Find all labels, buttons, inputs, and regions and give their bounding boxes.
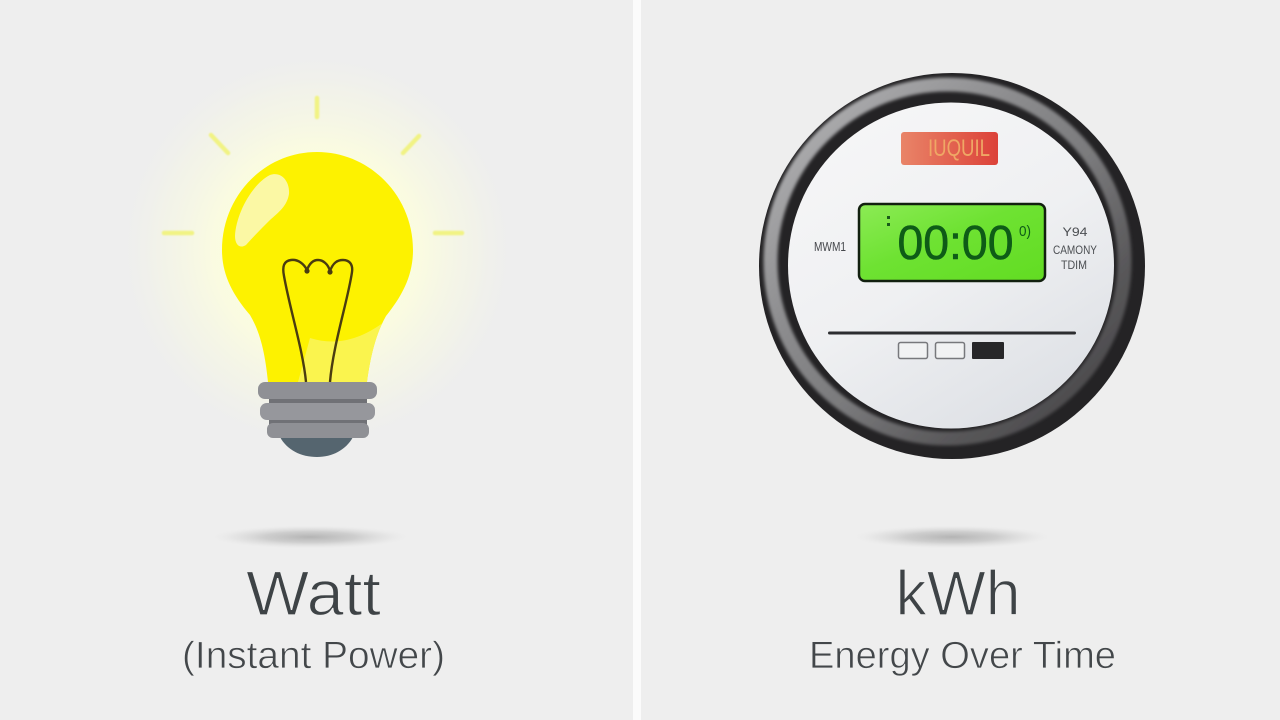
infographic: watt vs kWh comparison xyxy=(160,0,1145,720)
filament xyxy=(283,260,352,382)
icon: light glow xyxy=(112,45,522,455)
divider line xyxy=(828,332,1076,334)
LCD display xyxy=(859,204,1045,281)
bulb reflection xyxy=(235,174,289,247)
right labels: TDIM xyxy=(1061,258,1087,272)
right labels: Y94 xyxy=(1062,225,1088,239)
meter face xyxy=(788,102,1114,428)
red display: IUQUIL xyxy=(928,135,990,162)
red display xyxy=(901,132,998,165)
subheading: energy over time: Energy Over Time xyxy=(809,635,1116,677)
bulb lower highlight xyxy=(298,322,384,382)
right labels: CAMONY xyxy=(1053,243,1097,257)
filament contacts xyxy=(304,268,333,275)
ground shadow xyxy=(850,525,1054,549)
subheading: instant power: (Instant Power) xyxy=(182,635,445,677)
panel: watt xyxy=(160,94,466,676)
LCD display: 0) xyxy=(1019,223,1031,240)
heading: Watt: Watt xyxy=(246,559,382,629)
ground shadow xyxy=(208,525,412,549)
indicator boxes xyxy=(898,342,1004,359)
icon: light rays xyxy=(164,98,462,233)
right labels xyxy=(1053,225,1097,272)
icon: light bulb xyxy=(222,152,413,457)
icon: electricity meter xyxy=(759,73,1145,459)
meter ring highlight xyxy=(770,84,1124,438)
panel: kWh xyxy=(759,73,1145,677)
heading: kWh: kWh xyxy=(896,559,1020,629)
meter outer ring xyxy=(759,73,1145,459)
screw base xyxy=(258,382,377,457)
left label: MWM1 xyxy=(814,239,846,254)
LCD display: 00:00 xyxy=(898,217,1014,270)
panel: divider xyxy=(633,0,641,720)
bulb glass xyxy=(222,152,413,382)
